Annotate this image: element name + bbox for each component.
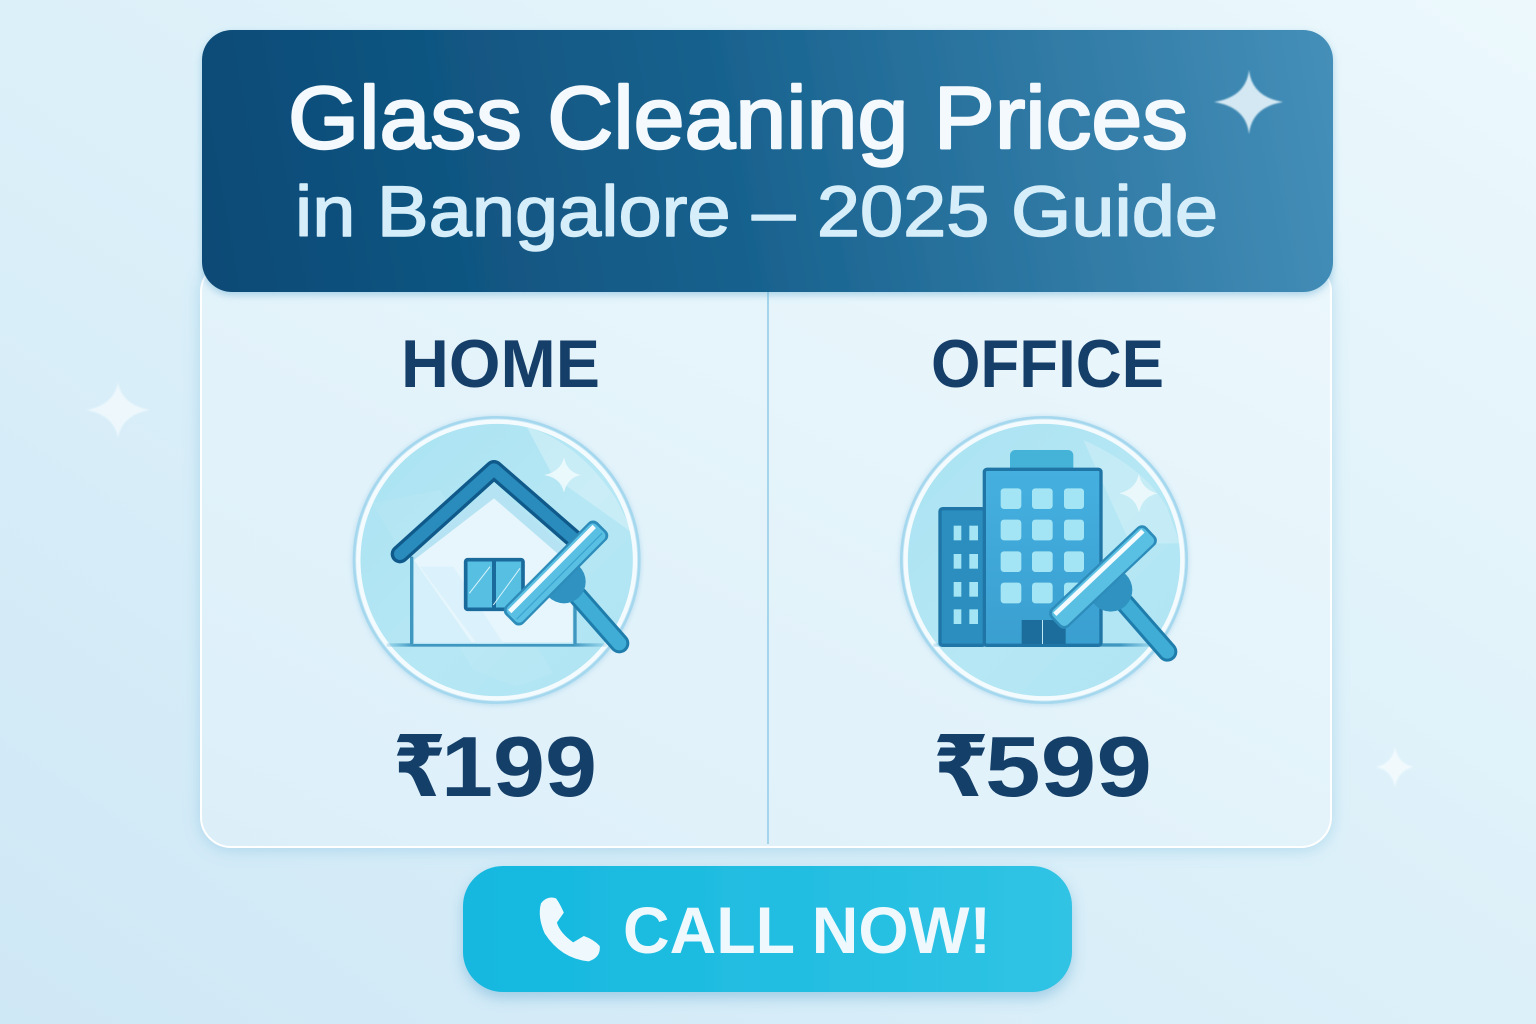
panel: home column (354, 326, 639, 815)
icon: house with squeegee (354, 417, 639, 703)
heading: home: HOME (401, 326, 600, 402)
icon: phone (540, 898, 600, 961)
panel: title banner (202, 30, 1333, 292)
price: office: ₹ (933, 720, 989, 815)
call to action button (463, 866, 1072, 992)
price: home: ₹ (393, 720, 446, 815)
panel: price card (201, 262, 1331, 847)
sparkle: right background (1376, 747, 1414, 787)
subtitle: in Bangalore – 2025 Guide (295, 173, 1218, 252)
column divider (767, 292, 769, 844)
price: office (933, 720, 1152, 815)
price: home (393, 720, 597, 815)
panel: office column (901, 326, 1187, 815)
price: office: 599 (985, 720, 1152, 815)
call now label: CALL NOW! (623, 893, 991, 967)
sparkle: banner (1214, 70, 1283, 134)
heading: office: OFFICE (931, 326, 1164, 402)
icon: office buildings with squeegee (901, 417, 1187, 703)
price: home: 199 (441, 720, 597, 815)
sparkle: left background (86, 382, 150, 438)
squeegee (1046, 522, 1167, 652)
squeegee (501, 518, 619, 643)
title: Glass Cleaning Prices (288, 68, 1188, 167)
